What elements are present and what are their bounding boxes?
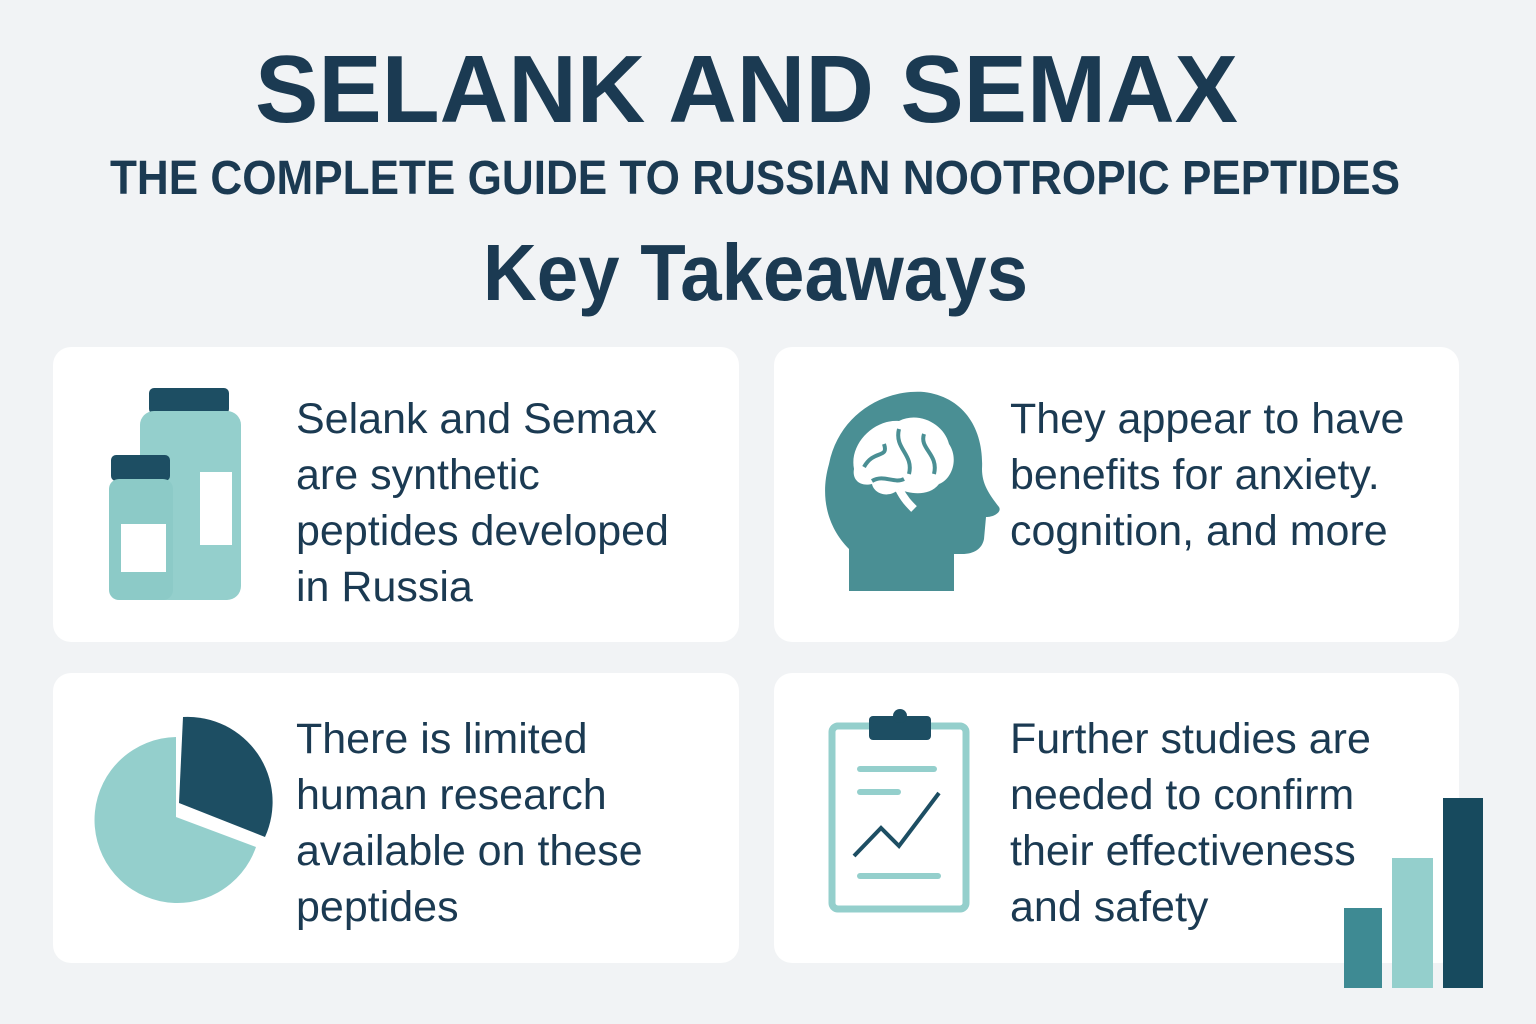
icon: head with brain (825, 392, 1000, 591)
text (296, 395, 669, 611)
text: in Russia (296, 563, 473, 611)
title: THE COMPLETE GUIDE TO RUSSIAN NOOTROPIC PEPTIDES (110, 152, 1400, 205)
text: available on these (296, 827, 643, 875)
panel: limited research (53, 673, 739, 963)
title: Key Takeaways (483, 228, 1028, 317)
text: and safety (1010, 883, 1208, 931)
text: There is limited (296, 715, 588, 763)
icon: bottles (109, 388, 241, 600)
text: needed to confirm (1010, 771, 1354, 819)
title (110, 36, 1400, 317)
panel: further studies (774, 673, 1459, 963)
text: benefits for anxiety. (1010, 451, 1380, 499)
text: peptides developed (296, 507, 669, 555)
panel: synthetic peptides (53, 347, 739, 642)
text: are synthetic (296, 451, 540, 499)
text: peptides (296, 883, 459, 931)
text (296, 715, 643, 931)
text: human research (296, 771, 607, 819)
text: They appear to have (1010, 395, 1404, 443)
text: Further studies are (1010, 715, 1371, 763)
panel: benefits (774, 347, 1459, 642)
icon: clipboard with chart (828, 709, 970, 912)
text: their effectiveness (1010, 827, 1356, 875)
text (1010, 395, 1404, 555)
text (1010, 715, 1371, 931)
icon: pie chart (94, 716, 273, 903)
title: SELANK AND SEMAX (255, 36, 1238, 143)
icon: bar chart (1344, 798, 1483, 988)
text: Selank and Semax (296, 395, 657, 443)
text: cognition, and more (1010, 507, 1388, 555)
